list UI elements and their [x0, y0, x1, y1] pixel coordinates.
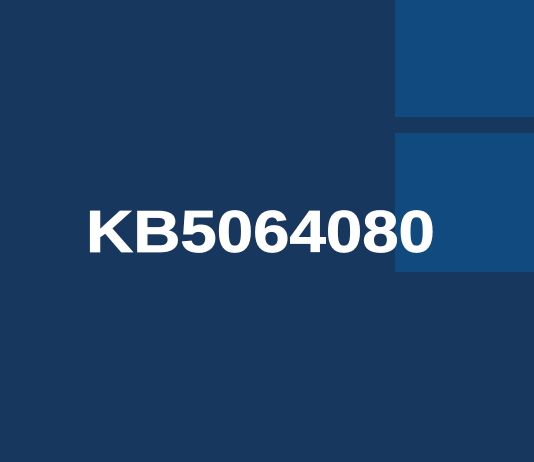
title: KB5064080 — [86, 199, 435, 265]
logo pane: top — [395, 0, 534, 117]
logo pane: bottom — [395, 133, 534, 272]
